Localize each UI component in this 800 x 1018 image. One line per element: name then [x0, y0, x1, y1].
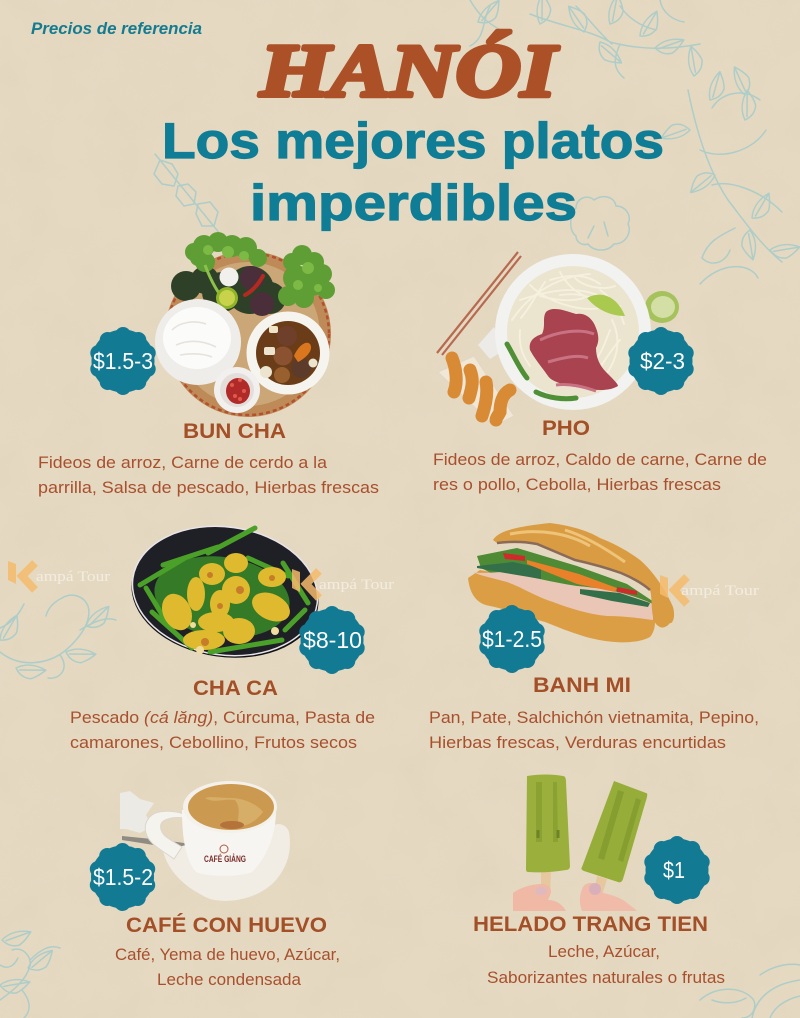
price badge: Café con Huevo: $1.5-2 — [93, 864, 153, 890]
ingredients: Banh Mi: Pan, Pate, Salchichón vietnamita, Pepino, — [429, 708, 759, 727]
dish: Pho photo — [437, 252, 679, 426]
price badge: Pho — [628, 327, 694, 395]
floral ornament: right side — [661, 46, 800, 284]
subtitle: line 2: imperdibles — [250, 175, 577, 231]
heading: Cha Ca: CHA CA — [193, 677, 278, 700]
price badge: Helado Trang Tien — [644, 836, 710, 904]
watermark: Kampá Tour left — [8, 561, 110, 590]
price badge: Café con Huevo — [90, 843, 155, 911]
floral ornament: top right — [470, 0, 700, 78]
ingredients: Cha Ca: Pescado (cá lăng), Cúrcuma, Pasta de — [70, 708, 375, 727]
price badge: Cha Ca — [299, 606, 365, 674]
watermark: Kampá Tour centre: ampá Tour — [319, 577, 394, 593]
heading: Pho: PHO — [542, 417, 590, 440]
floral ornament: bottom left — [0, 927, 60, 1018]
ingredients: Helado Trang Tien: Saborizantes naturales o frutas — [487, 968, 725, 987]
ornament: bottom right sketch — [700, 964, 800, 1018]
ingredients: Banh Mi — [429, 708, 759, 752]
ingredients: Pho: Fideos de arroz, Caldo de carne, Carne de — [433, 450, 767, 469]
watermark: Kampá Tour right: ampá Tour — [681, 583, 759, 599]
heading: Café con Huevo: CAFÉ CON HUEVO — [126, 914, 327, 937]
ornament: skewer sketch — [154, 154, 225, 240]
ingredients: Pho: res o pollo, Cebolla, Hierbas frescas — [433, 475, 721, 494]
ingredients: Helado Trang Tien: Leche, Azúcar, — [548, 942, 660, 961]
ingredients: Helado Trang Tien — [487, 942, 725, 987]
ingredients: Bun Cha — [38, 453, 379, 497]
dish: Bun Cha photo — [155, 232, 335, 417]
title: Hanói: HANÓI — [259, 30, 559, 113]
ingredients: Cha Ca — [70, 708, 375, 752]
dish: Café con Huevo photo — [120, 781, 290, 901]
price badge: Banh Mi — [479, 605, 545, 673]
ingredients: Cha Ca: camarones, Cebollino, Frutos secos — [70, 733, 357, 752]
ingredients: Bun Cha: parrilla, Salsa de pescado, Hierbas frescas — [38, 478, 379, 497]
ingredients: Café con Huevo: Café, Yema de huevo, Azúcar, — [115, 945, 340, 964]
price badge: Helado Trang Tien: $1 — [663, 857, 685, 883]
dish: Banh Mi photo — [468, 523, 674, 642]
dish: Café con Huevo photo: CAFÉ GIẢNG — [204, 853, 246, 864]
heading: Bun Cha: BUN CHA — [183, 420, 286, 443]
ornament: broccoli sketch — [571, 197, 629, 250]
price badge: Bun Cha: $1.5-3 — [93, 348, 153, 374]
dish: Cha Ca photo — [123, 515, 327, 669]
watermark: Kampá Tour centre — [292, 569, 394, 598]
watermark: Kampá Tour left: ampá Tour — [36, 569, 110, 585]
price badge: Banh Mi: $1-2.5 — [482, 626, 542, 652]
ingredients: Café con Huevo: Leche condensada — [157, 970, 302, 989]
floral ornament: left middle — [0, 595, 116, 685]
ingredients: Banh Mi: Hierbas frescas, Verduras encurtidas — [429, 733, 726, 752]
heading: Helado Trang Tien: HELADO TRANG TIEN — [473, 913, 708, 936]
heading: Banh Mi: BANH MI — [533, 674, 631, 697]
watermark: Kampá Tour right — [660, 575, 759, 604]
ingredients: Bun Cha: Fideos de arroz, Carne de cerdo a la — [38, 453, 328, 472]
price badge: Pho: $2-3 — [640, 348, 685, 374]
price badge: Cha Ca: $8-10 — [303, 627, 362, 653]
subtitle: line 1: Los mejores platos — [162, 113, 664, 169]
dish: Helado Trang Tien photo — [513, 774, 647, 911]
ingredients: Café con Huevo — [115, 945, 340, 989]
ingredients: Pho — [433, 450, 767, 494]
price badge: Bun Cha — [90, 327, 156, 395]
note: reference prices: Precios de referencia — [31, 20, 202, 38]
